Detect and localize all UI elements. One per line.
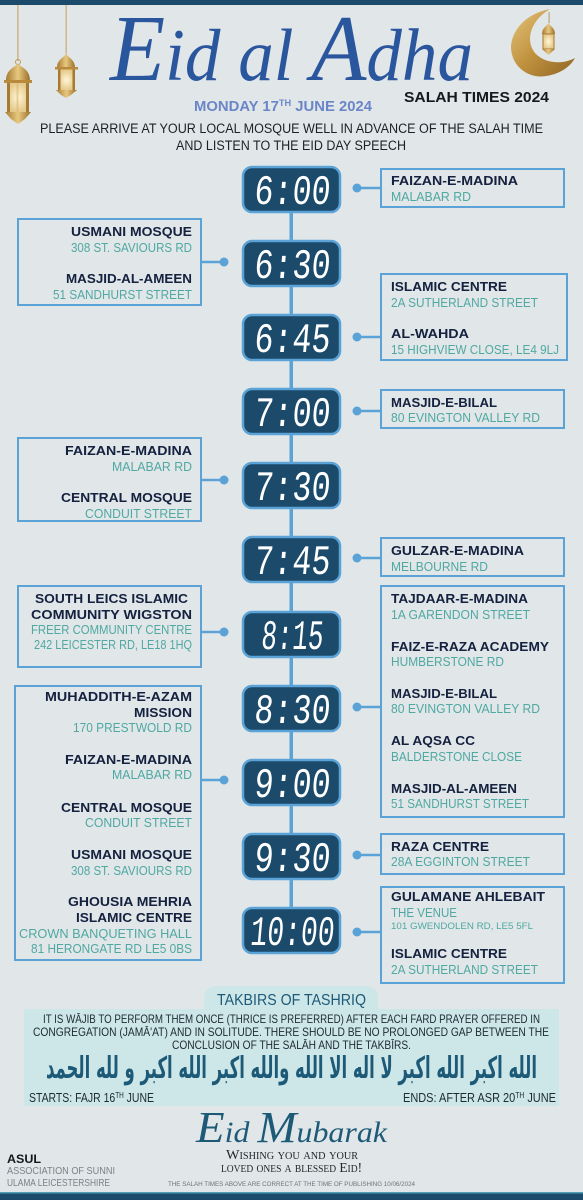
- subtitle: salah times: SALAH TIMES 2024: [404, 89, 550, 106]
- venue: Central Mosque: CONDUIT STREET: [85, 506, 192, 521]
- venue: Masjid-al-Ameen: 51 SANDHURST STREET: [53, 287, 192, 302]
- venue: Masjid-e-Bilal: [391, 395, 540, 425]
- panel: 10:00 venues: [381, 887, 564, 983]
- clock: 10:00: 10:00: [248, 910, 337, 958]
- clock: 9:30: 9:30: [252, 836, 333, 884]
- venue: South Leics Islamic Community Wigston: COMMUNITY WIGSTON: [31, 607, 192, 622]
- starts date: JUNE: [124, 1090, 154, 1105]
- panel: 8:15 venues: [18, 586, 201, 667]
- date: MONDAY 17: [194, 99, 277, 115]
- venue: Masjid-al-Ameen: 51 SANDHURST STREET: [391, 796, 529, 811]
- connector: 6:00: [352, 184, 381, 192]
- venue: Faizan-e-Madina: FAIZAN-E-MADINA: [65, 443, 193, 458]
- heading: eid mubarak: Eid Mubarak: [195, 1103, 388, 1152]
- connector: 9:00: [201, 776, 228, 784]
- intro text: [40, 121, 543, 153]
- venue: Al-Wahda: [391, 326, 559, 357]
- panel: takbirs of tashriq: [24, 986, 559, 1106]
- venue: South Leics Islamic Community Wigston: [31, 591, 192, 652]
- venue: Islamic Centre: 2A SUTHERLAND STREET: [391, 295, 538, 310]
- title: Eid al Adha: [108, 0, 473, 101]
- venue: Al-Wahda: AL-WAHDA: [391, 326, 470, 341]
- venue: Islamic Centre: ISLAMIC CENTRE: [391, 946, 507, 961]
- venue: Gulzar-e-Madina: MELBOURNE RD: [391, 559, 488, 574]
- venue: Ghousia Mehria Islamic Centre: 81 HERONGATE RD LE5 0BS: [31, 941, 192, 956]
- venue: Gulamane Ahlebait: [391, 889, 545, 932]
- connector: 6:45: [352, 332, 381, 342]
- venue: Central Mosque: CENTRAL MOSQUE: [61, 490, 192, 505]
- venue: Faizan-e-Madina: [391, 173, 519, 204]
- venue: Usmani Mosque: 308 ST. SAVIOURS RD: [71, 863, 192, 878]
- panel: 9:30 venues: [381, 834, 564, 874]
- venue: Faizan-e-Madina: MALABAR RD: [112, 459, 192, 474]
- connector: 7:30: [201, 476, 228, 484]
- venue: Al Aqsa CC: [391, 733, 522, 764]
- date: JUNE 2024: [291, 99, 372, 115]
- venue: Ghousia Mehria Islamic Centre: [19, 894, 193, 956]
- venue: Masjid-al-Ameen: [53, 271, 192, 302]
- date: TH: [279, 98, 291, 108]
- footer note: THE SALAH TIMES ABOVE ARE CORRECT AT THE TIME OF PUBLISHING 10/06/2024: [168, 1181, 415, 1188]
- connector: 7:45: [352, 554, 381, 562]
- text block: greeting: Wishing you and your: [226, 1148, 358, 1163]
- venue: Masjid-al-Ameen: MASJID-AL-AMEEN: [391, 781, 517, 796]
- venue: Faizan-e-Madina: FAIZAN-E-MADINA: [65, 752, 193, 767]
- venue: Gulamane Ahlebait: GULAMANE AHLEBAIT: [391, 889, 545, 904]
- venue: Faiz-e-Raza Academy: [391, 639, 549, 669]
- panel: 6:30 venues: [18, 219, 201, 305]
- icon: crescent moon with lantern: [511, 9, 575, 76]
- venue: Gulzar-e-Madina: [391, 543, 525, 574]
- ends date: TH: [515, 1091, 524, 1100]
- text block: greeting: loved ones a blessed Eid!: [221, 1161, 362, 1176]
- intro text: PLEASE ARRIVE AT YOUR LOCAL MOSQUE WELL IN ADVANCE OF THE SALAH TIME: [40, 121, 543, 136]
- panel: 8:15-8:30 venues right: [381, 586, 564, 817]
- panel: 7:30 venues: [18, 438, 201, 521]
- venue: Faizan-e-Madina: [65, 443, 193, 474]
- venue: Masjid-al-Ameen: MASJID-AL-AMEEN: [66, 271, 192, 286]
- organisation: ASUL: ASSOCIATION OF SUNNI: [7, 1165, 115, 1177]
- organisation: ASUL: ULAMA LEICESTERSHIRE: [7, 1177, 110, 1189]
- clock: 6:30: 6:30: [252, 243, 333, 291]
- venue: Usmani Mosque: USMANI MOSQUE: [71, 847, 192, 862]
- connector: 8:15: [201, 628, 228, 636]
- venue: Tajdaar-e-Madina: TAJDAAR-E-MADINA: [391, 591, 529, 606]
- venue: Tajdaar-e-Madina: [391, 591, 530, 622]
- connector: 9:30: [352, 850, 381, 860]
- venue: Al Aqsa CC: AL AQSA CC: [391, 733, 476, 748]
- venue: Tajdaar-e-Madina: 1A GARENDON STREET: [391, 607, 530, 622]
- venue: Faizan-e-Madina: FAIZAN-E-MADINA: [391, 173, 519, 188]
- venue: Islamic Centre: 2A SUTHERLAND STREET: [391, 962, 538, 977]
- venue: South Leics Islamic Community Wigston: 242 LEICESTER RD, LE18 1HQ: [34, 637, 192, 652]
- venue: Muhaddith-e-Azam Mission: MISSION: [134, 705, 192, 720]
- connector: 6:30: [201, 258, 228, 266]
- venue: Islamic Centre: [391, 946, 538, 977]
- text block: takbir explanation: [33, 1012, 549, 1052]
- venue: Usmani Mosque: [71, 847, 192, 878]
- panel: 6:00 venues: [381, 169, 564, 207]
- clock: 8:30: 8:30: [252, 688, 333, 736]
- clock: 8:15: 8:15: [259, 614, 326, 662]
- panel: 6:45 venues: [381, 274, 567, 360]
- heading: takbirs of tashriq: TAKBIRS OF TASHRIQ: [217, 992, 366, 1009]
- panel: 7:00 venues: [381, 390, 564, 428]
- text block: takbir explanation: CONCLUSION OF THE SALĀH AND THE TAKBĪRS.: [172, 1038, 411, 1052]
- connector: 10:00: [352, 928, 381, 936]
- venue: Raza Centre: RAZA CENTRE: [391, 839, 489, 854]
- venue: Muhaddith-e-Azam Mission: MUHADDITH-E-AZAM: [45, 689, 192, 704]
- venue: Masjid-e-Bilal: 80 EVINGTON VALLEY RD: [391, 701, 540, 716]
- venue: Masjid-e-Bilal: 80 EVINGTON VALLEY RD: [391, 410, 540, 425]
- venue: Masjid-al-Ameen: [391, 781, 529, 811]
- venue: Faiz-e-Raza Academy: HUMBERSTONE RD: [391, 654, 504, 669]
- venue: Central Mosque: CENTRAL MOSQUE: [61, 800, 192, 815]
- venue: Usmani Mosque: [71, 224, 192, 255]
- venue: Masjid-e-Bilal: [391, 686, 540, 716]
- panel: 9:00 venues: [15, 686, 201, 960]
- organisation: ASUL: ASUL: [7, 1152, 41, 1166]
- venue: Islamic Centre: ISLAMIC CENTRE: [391, 279, 507, 294]
- icon: large hanging lantern: [4, 5, 32, 124]
- clock: 8:15: [243, 612, 340, 662]
- venue: Raza Centre: [391, 839, 530, 869]
- venue: Faiz-e-Raza Academy: FAIZ-E-RAZA ACADEMY: [391, 639, 549, 654]
- venue: Masjid-e-Bilal: MASJID-E-BILAL: [391, 395, 497, 410]
- venue: Muhaddith-e-Azam Mission: 170 PRESTWOLD RD: [73, 720, 192, 735]
- text block: greeting: [221, 1148, 362, 1176]
- venue: Gulamane Ahlebait: THE VENUE: [391, 905, 457, 920]
- venue: Islamic Centre: [391, 279, 538, 310]
- venue: Ghousia Mehria Islamic Centre: ISLAMIC CENTRE: [76, 910, 192, 925]
- venue: Central Mosque: [61, 800, 192, 830]
- venue: Central Mosque: CONDUIT STREET: [85, 815, 192, 830]
- venue: Al Aqsa CC: BALDERSTONE CLOSE: [391, 749, 522, 764]
- venue: Faizan-e-Madina: MALABAR RD: [391, 189, 471, 204]
- venue: Usmani Mosque: USMANI MOSQUE: [71, 224, 192, 239]
- connector: 8:30 right: [352, 702, 381, 712]
- clock: 10:00: [243, 908, 340, 958]
- clock: 7:30: 7:30: [252, 465, 333, 513]
- ends date: JUNE: [524, 1090, 556, 1105]
- venue: Central Mosque: [61, 490, 192, 521]
- venue: Masjid-e-Bilal: MASJID-E-BILAL: [391, 686, 497, 701]
- venue: Raza Centre: 28A EGGINTON STREET: [391, 854, 530, 869]
- ends date: ENDS: AFTER ASR 20: [403, 1090, 536, 1105]
- venue: Al-Wahda: 15 HIGHVIEW CLOSE, LE4 9LJ: [391, 342, 559, 357]
- intro text: AND LISTEN TO THE EID DAY SPEECH: [176, 138, 406, 153]
- venue: Gulzar-e-Madina: GULZAR-E-MADINA: [391, 543, 525, 558]
- clock: 9:00: 9:00: [252, 762, 333, 810]
- starts date: TH: [115, 1091, 124, 1100]
- clock: 7:45: 7:45: [252, 539, 333, 587]
- venue: Ghousia Mehria Islamic Centre: GHOUSIA MEHRIA: [68, 894, 193, 909]
- clock: 6:45: 6:45: [252, 317, 333, 365]
- venue: South Leics Islamic Community Wigston: SOUTH LEICS ISLAMIC: [35, 591, 189, 606]
- connector: 7:00: [352, 406, 381, 416]
- organisation: ASUL: [7, 1152, 115, 1189]
- panel: 7:45 venues: [381, 538, 564, 576]
- starts date: STARTS: FAJR 16: [29, 1090, 136, 1105]
- clock: 6:00: 6:00: [252, 169, 333, 217]
- timeline spine: [290, 205, 293, 915]
- clock: 7:00: 7:00: [252, 391, 333, 439]
- icon: small hanging lantern: [55, 5, 78, 98]
- venue: Gulamane Ahlebait: 101 GWENDOLEN RD, LE5 5FL: [391, 921, 533, 932]
- venue: Usmani Mosque: 308 ST. SAVIOURS RD: [71, 240, 192, 255]
- venue: South Leics Islamic Community Wigston: FREER COMMUNITY CENTRE: [31, 622, 192, 637]
- venue: Muhaddith-e-Azam Mission: [45, 689, 192, 735]
- venue: Ghousia Mehria Islamic Centre: CROWN BANQUETING HALL: [19, 926, 192, 941]
- venue: Faizan-e-Madina: [65, 752, 193, 782]
- venue: Faizan-e-Madina: MALABAR RD: [112, 767, 192, 782]
